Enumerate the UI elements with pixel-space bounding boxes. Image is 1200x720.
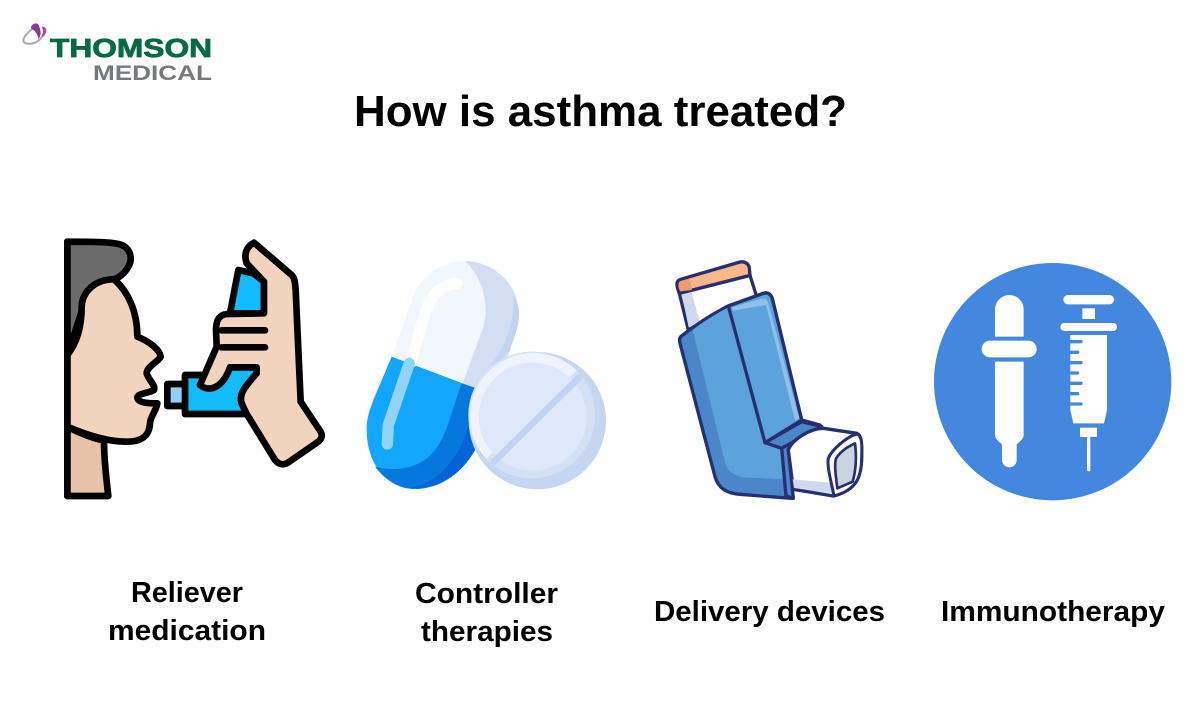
- side highlight: [732, 299, 799, 421]
- capsule white half shade: [463, 261, 519, 388]
- inhaler body: [680, 293, 820, 498]
- logo wordmark: Medical: MEDICAL: [93, 62, 212, 85]
- dropper: [982, 295, 1037, 467]
- cap shade: [678, 279, 692, 291]
- tablet rim: [470, 353, 577, 459]
- neck: [67, 427, 108, 496]
- mouthpiece shade: [793, 479, 833, 493]
- face: [67, 279, 161, 442]
- logo: Thomson Medical: [23, 23, 212, 85]
- syringe scale ticks: [1070, 342, 1081, 404]
- canister: [679, 275, 757, 330]
- title: How is asthma treated?: [354, 87, 847, 136]
- label: controller therapies: [415, 578, 558, 648]
- icon: inhaler device: [677, 262, 862, 498]
- label: immunotherapy: Immunotherapy: [941, 596, 1165, 628]
- body front face: [693, 307, 785, 479]
- capsule blue highlight: [387, 363, 409, 444]
- fingers: [222, 330, 265, 347]
- capsule highlight: [411, 283, 457, 363]
- capsule blue shade: [375, 383, 477, 489]
- label: reliever medication: Reliever: [131, 577, 243, 609]
- label: controller therapies: Controller: [415, 578, 558, 610]
- icon: capsule and tablet: [367, 261, 606, 489]
- hand: [200, 243, 322, 464]
- tablet score line: [494, 377, 579, 462]
- capsule darkest shade: [410, 423, 475, 488]
- capsule blue half: [367, 357, 476, 489]
- icon: immunotherapy dropper and syringe: [934, 263, 1171, 500]
- mouthpiece opening rim: [828, 434, 862, 496]
- tablet: [469, 352, 606, 489]
- mouthpiece opening: [835, 443, 856, 488]
- tablet face: [479, 363, 587, 471]
- label: delivery devices: Delivery devices: [654, 596, 885, 628]
- inhaler canister: [230, 270, 264, 313]
- logo wordmark: Thomson: THOMSON: [50, 33, 212, 63]
- inhaler body: [185, 367, 257, 414]
- label: controller therapies: therapies: [421, 616, 553, 648]
- tablet lower band: [468, 352, 595, 478]
- inhaler mouthpiece: [167, 384, 185, 406]
- icon: person using reliever inhaler: [67, 242, 322, 496]
- collar band: [782, 427, 823, 498]
- capsule edge shade: [490, 295, 519, 365]
- capsule white half: [392, 261, 519, 388]
- label: reliever medication: [108, 577, 266, 647]
- icon: logo heart with purple wings: [23, 23, 46, 44]
- body side face: [728, 293, 802, 443]
- canister shade: [682, 293, 699, 327]
- head back edge: [57, 242, 77, 496]
- canister cap: [677, 262, 750, 293]
- blue circle: [934, 263, 1171, 500]
- collar: [765, 422, 822, 448]
- hair: [67, 242, 131, 355]
- mouthpiece: [788, 428, 862, 496]
- label: reliever medication: medication: [108, 615, 266, 647]
- syringe: [1060, 295, 1117, 471]
